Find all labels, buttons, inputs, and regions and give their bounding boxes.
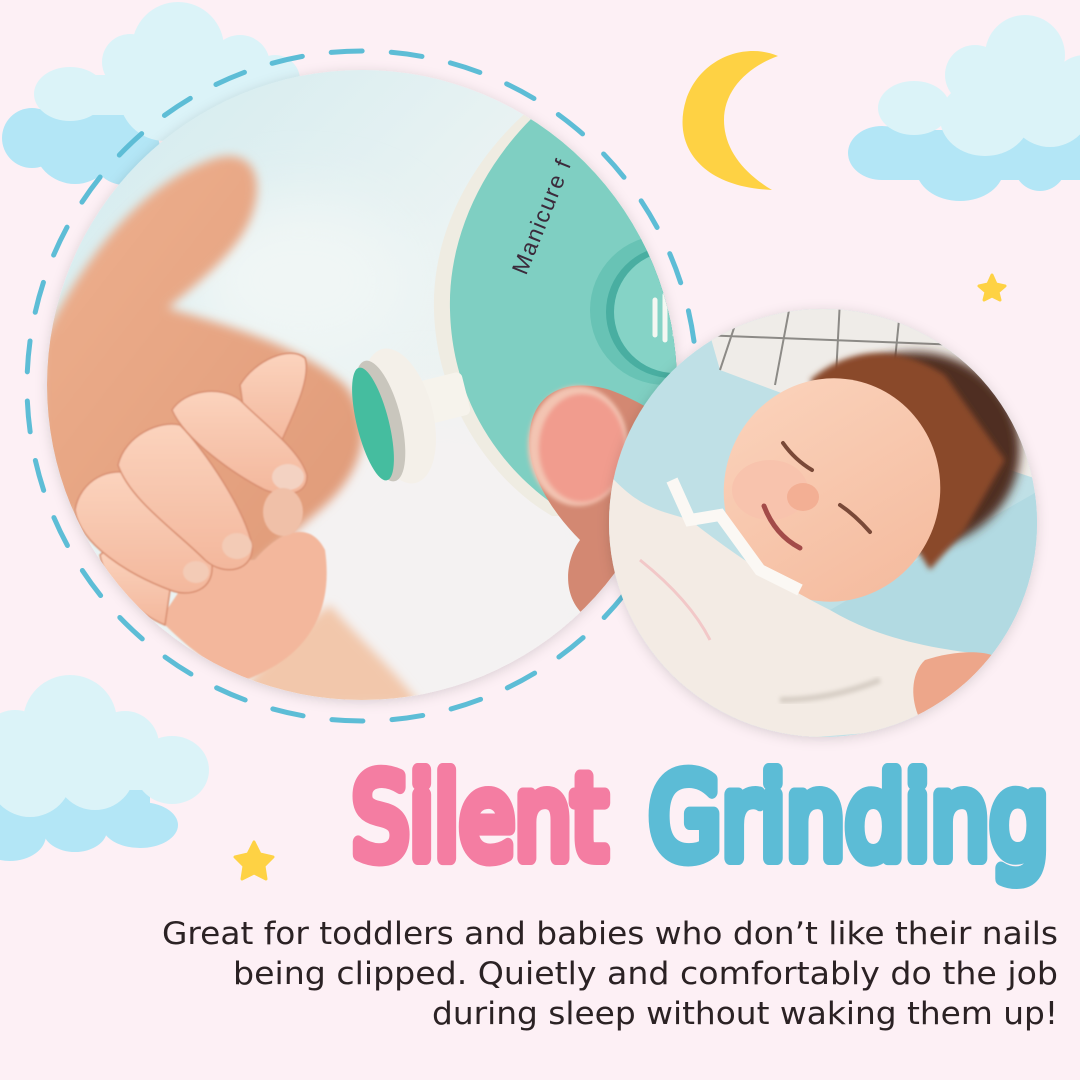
- label: Manicure text: Manicure f: [507, 155, 576, 278]
- body: [600, 470, 990, 740]
- body text: [162, 916, 1058, 1032]
- cloud: top right: [848, 15, 1080, 201]
- adult hand: [40, 156, 420, 710]
- baby hand: [913, 652, 992, 715]
- body text: being clipped. Quietly and comfortably do the job: [233, 956, 1058, 992]
- body text: Great for toddlers and babies who don’t like their nails: [162, 916, 1058, 952]
- cloud: top left: [2, 2, 300, 185]
- heading: [352, 751, 1049, 886]
- dashed ring: [27, 51, 697, 721]
- body text: during sleep without waking them up!: [432, 996, 1058, 1032]
- heading word: Silent: Silent: [352, 751, 607, 886]
- icon: crescent moon: [683, 51, 778, 190]
- holding thumb: [525, 383, 644, 612]
- pillow checked: [712, 309, 1032, 478]
- trimmer head: [352, 348, 470, 484]
- photo: nail trimmer and baby hand: [42, 68, 680, 706]
- sheet: [830, 493, 1037, 658]
- face: [724, 378, 940, 602]
- icon: star bottom left: [235, 842, 273, 879]
- cloud: bottom left: [0, 675, 209, 861]
- baby hand: [75, 353, 327, 680]
- icon: star right: [979, 275, 1005, 300]
- hair: [810, 352, 1020, 570]
- photo: sleeping baby: [600, 300, 1050, 750]
- trimmer body: [434, 115, 676, 516]
